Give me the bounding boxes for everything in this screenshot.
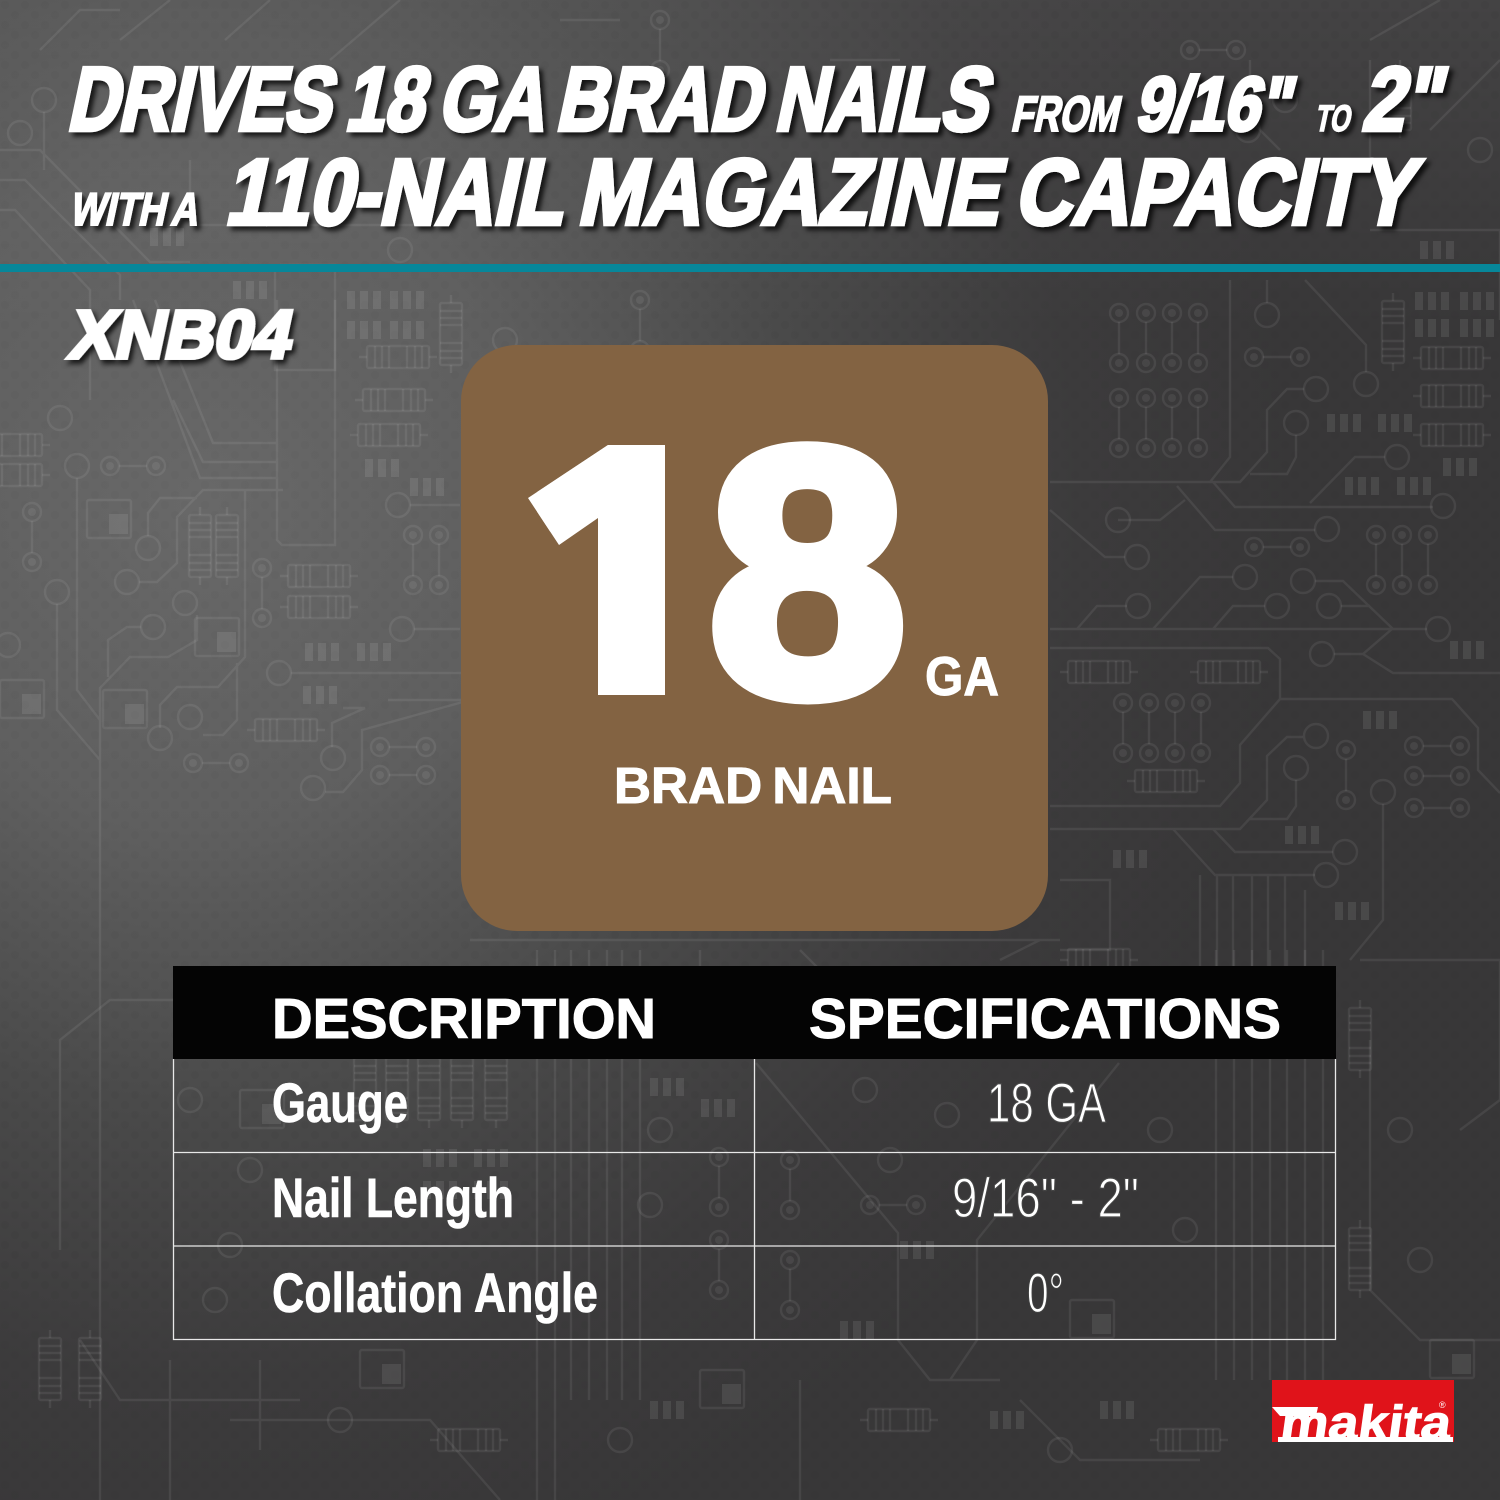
big number 18 — [528, 441, 904, 704]
row: nail length: 9/16" - 2" — [952, 1166, 1139, 1229]
title line 2: with a: WITH A — [67, 183, 206, 235]
title line 1: 2 inch: 2" — [1357, 50, 1456, 150]
table grid — [173, 1059, 1336, 1340]
brad nail label: BRAD NAIL — [614, 757, 892, 814]
makita logo: ® — [1439, 1400, 1446, 1410]
row: gauge — [272, 1071, 1106, 1134]
title line 1: from: FROM — [1008, 86, 1127, 142]
table header: SPECIFICATIONS — [809, 987, 1281, 1051]
row: gauge: Gauge — [272, 1071, 408, 1134]
GA unit: GA — [925, 645, 999, 707]
title line 1: 9/16 inch: 9/16" — [1130, 62, 1304, 147]
model number: XNB04 — [64, 297, 301, 373]
big number 18: 1 — [505, 335, 766, 860]
makita logo: makita — [1277, 1396, 1456, 1450]
title — [62, 50, 1456, 244]
big number 18: 8 — [708, 375, 907, 769]
row: gauge: 18 GA — [987, 1071, 1106, 1134]
makita logo — [1272, 1380, 1456, 1450]
table header — [173, 966, 1336, 1059]
row: collation angle: Collation Angle — [272, 1261, 598, 1324]
row: nail length — [272, 1166, 1139, 1229]
row: nail length: Nail Length — [272, 1166, 514, 1229]
title line 1: main phrase: DRIVES 18 GA BRAD NAILS — [62, 50, 1003, 150]
specifications table — [173, 966, 1336, 1340]
teal divider — [0, 264, 1500, 272]
row: collation angle: 0° — [1027, 1261, 1064, 1324]
row: collation angle — [272, 1261, 1064, 1324]
title line 1: to: TO — [1312, 97, 1356, 139]
panel: gauge badge — [461, 335, 1048, 931]
table header: DESCRIPTION — [272, 987, 656, 1051]
